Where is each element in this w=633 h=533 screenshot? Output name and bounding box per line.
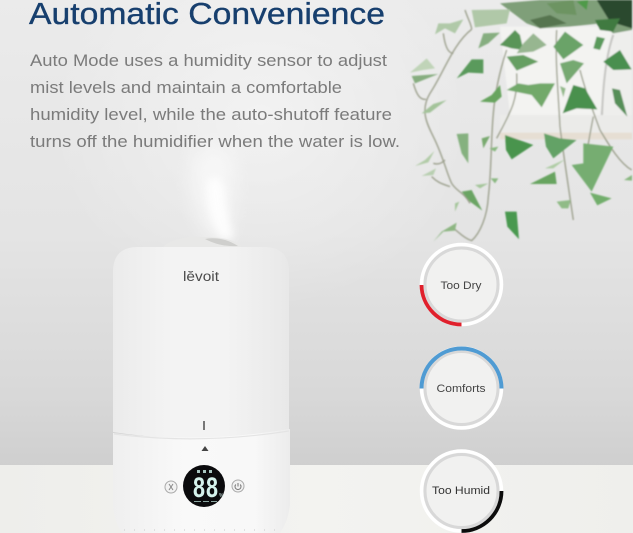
base vents xyxy=(124,529,280,531)
description text xyxy=(30,51,400,151)
mist plume xyxy=(190,146,235,240)
shelf xyxy=(500,115,632,139)
label: Comforts xyxy=(436,383,486,395)
description text: mist levels and maintain a comfortable xyxy=(30,78,342,97)
indicator: too humid xyxy=(422,451,502,531)
blue arc xyxy=(422,349,502,388)
seam line xyxy=(114,431,289,439)
description text: turns off the humidifier when the water is low. xyxy=(30,132,400,151)
description text: Auto Mode uses a humidity sensor to adjust xyxy=(30,51,387,70)
mode button xyxy=(165,481,177,493)
control display: 88 xyxy=(192,473,218,507)
mist outlet xyxy=(205,238,238,246)
plant on shelf xyxy=(410,0,632,242)
control display: % xyxy=(219,493,224,499)
base unit xyxy=(113,429,290,533)
description text: humidity level, while the auto-shutoff feature xyxy=(30,105,392,124)
water level mark xyxy=(203,421,205,430)
floor surface xyxy=(0,465,633,533)
label: Too Humid xyxy=(432,485,490,497)
power button xyxy=(232,480,244,492)
triangle mark xyxy=(202,446,208,451)
indicator: too dry xyxy=(422,244,502,324)
foliage mass xyxy=(500,0,632,33)
humidifier xyxy=(113,237,290,533)
indicator: comforts xyxy=(422,348,502,428)
soft light on wall xyxy=(50,0,470,310)
white pots xyxy=(500,27,632,115)
top cap xyxy=(163,237,242,247)
brand logo: lĕvoit xyxy=(183,269,219,284)
black arc xyxy=(462,491,502,531)
control display xyxy=(183,465,225,507)
red arc xyxy=(422,285,462,324)
ivy leaves xyxy=(410,9,632,242)
stems xyxy=(413,10,632,241)
water tank xyxy=(113,247,289,439)
label: Too Dry xyxy=(440,280,482,292)
